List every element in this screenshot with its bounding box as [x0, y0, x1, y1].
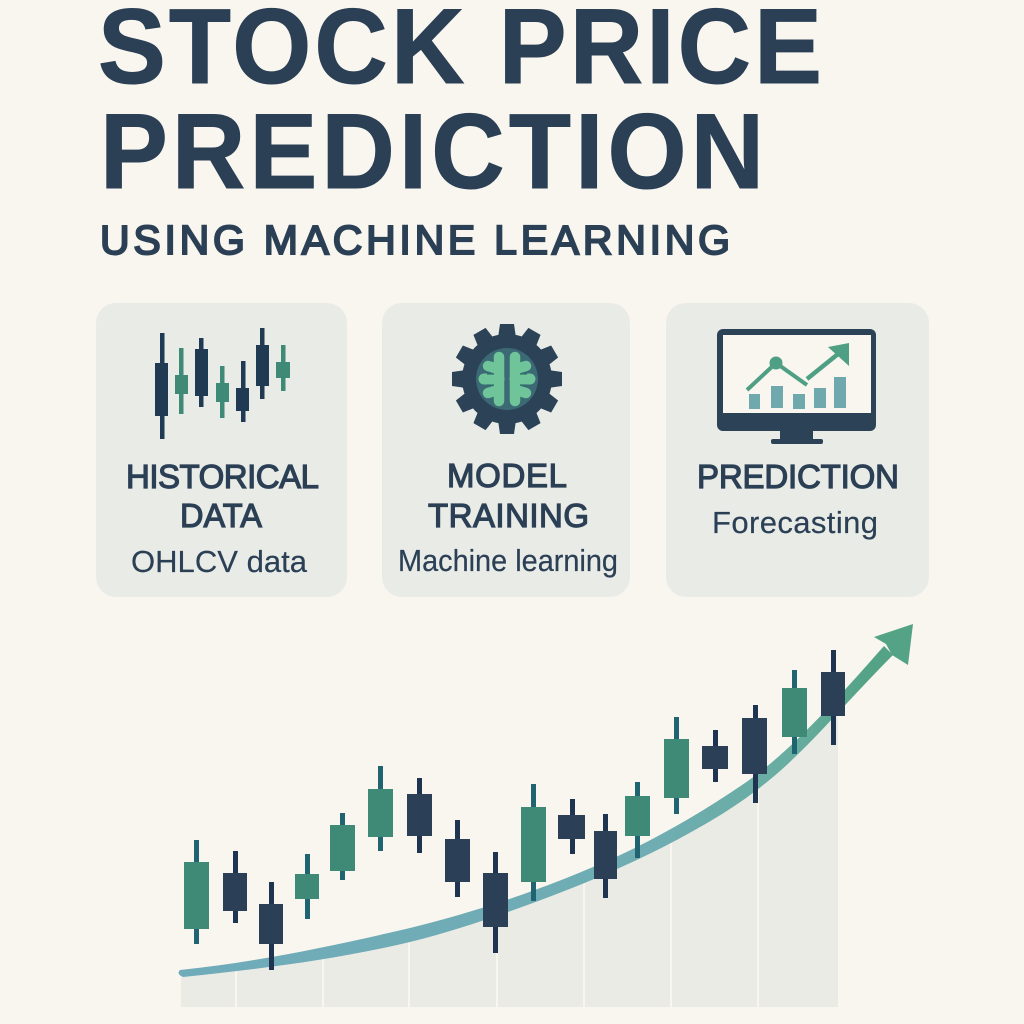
heading: historical data: HISTORICAL: [126, 458, 319, 495]
panel: prediction: [666, 303, 929, 597]
trend arrow: [179, 624, 913, 977]
heading: prediction: PREDICTION: [697, 458, 899, 495]
heading: historical data: [126, 458, 319, 534]
icon: candlesticks: [155, 328, 290, 439]
label: machine learning: Machine learning: [398, 543, 618, 578]
area under trend: [181, 716, 838, 1007]
label: forecasting: Forecasting: [712, 505, 878, 540]
subtitle: USING MACHINE LEARNING: [100, 217, 730, 263]
icon: monitor with chart: [717, 329, 876, 444]
label: OHLCV data: OHLCV data: [131, 544, 308, 579]
panel: model training: [382, 303, 630, 597]
panel: historical data: [96, 303, 347, 597]
title: PREDICTION: [100, 93, 764, 212]
bullish candles: [184, 670, 807, 944]
heading: model training: TRAINING: [428, 497, 589, 534]
icon: gear with brain: [452, 324, 562, 434]
bearish candles: [223, 650, 845, 970]
heading: model training: MODEL: [447, 457, 567, 494]
heading: historical data: DATA: [180, 497, 262, 534]
title: [98, 0, 822, 212]
heading: model training: [428, 457, 589, 534]
chart: candlesticks over rising trend: [170, 624, 913, 1008]
